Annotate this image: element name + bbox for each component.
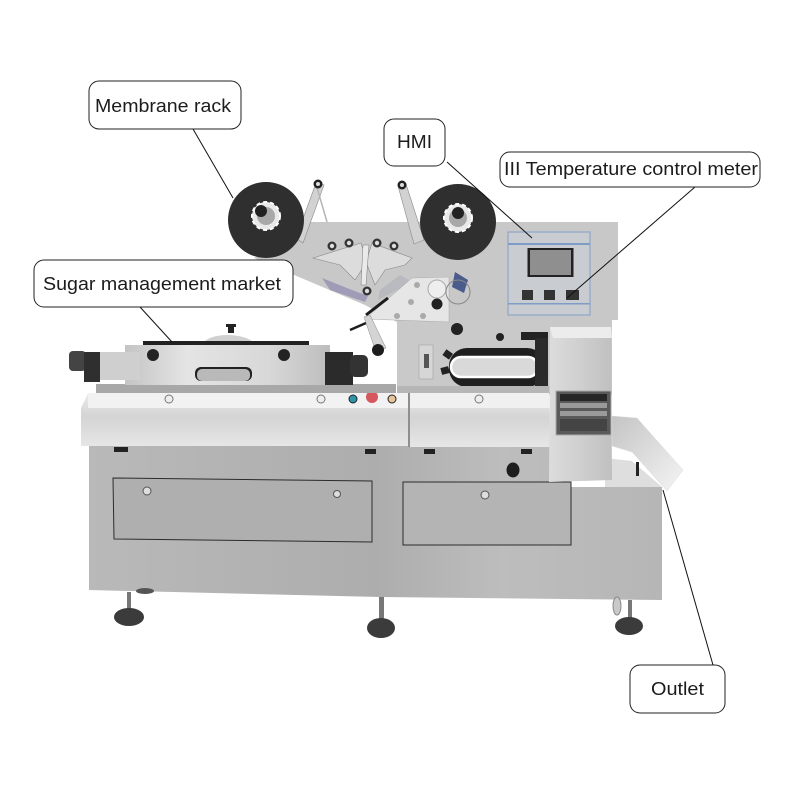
right door bbox=[403, 482, 571, 545]
callout: Sugar management market: Sugar management market bbox=[43, 274, 281, 294]
icon: levelling feet bbox=[114, 588, 643, 638]
callout: III Temperature control meter bbox=[500, 152, 760, 187]
membrane tension arms bbox=[296, 180, 424, 302]
callout: Membrane rack bbox=[89, 81, 241, 129]
unit: conveyor chain bbox=[397, 332, 552, 394]
callout: Outlet: Outlet bbox=[651, 679, 704, 699]
panel: back plate bbox=[254, 222, 618, 395]
leader lines bbox=[140, 129, 713, 665]
unit: candy hopper bbox=[69, 324, 396, 393]
icon: right motor bbox=[325, 352, 368, 385]
left door bbox=[113, 478, 372, 542]
panel: base cabinet bbox=[89, 445, 662, 600]
icon: temperature meters bbox=[522, 290, 579, 300]
icon: control buttons bbox=[165, 391, 483, 403]
machine bbox=[69, 180, 683, 638]
nameplate bbox=[556, 391, 611, 435]
icon: left motor bbox=[69, 351, 140, 382]
callout: HMI bbox=[384, 119, 445, 166]
icon: left membrane roll bbox=[228, 182, 304, 258]
callout: III Temperature control meter: III Temperature control meter bbox=[504, 159, 758, 179]
callout: Membrane rack: Membrane rack bbox=[95, 96, 232, 116]
icon: touch screen bbox=[528, 248, 574, 277]
panel: HMI control box bbox=[508, 232, 590, 315]
callout: Sugar management market bbox=[34, 260, 293, 307]
callout: HMI: HMI bbox=[397, 132, 432, 152]
icon: right membrane roll bbox=[420, 184, 496, 260]
unit: control console bbox=[81, 391, 552, 447]
unit: outlet chute bbox=[605, 416, 683, 491]
callout: Outlet bbox=[630, 665, 725, 713]
panel: wrapping box bbox=[549, 327, 612, 482]
unit: sealing plate bbox=[350, 272, 470, 356]
